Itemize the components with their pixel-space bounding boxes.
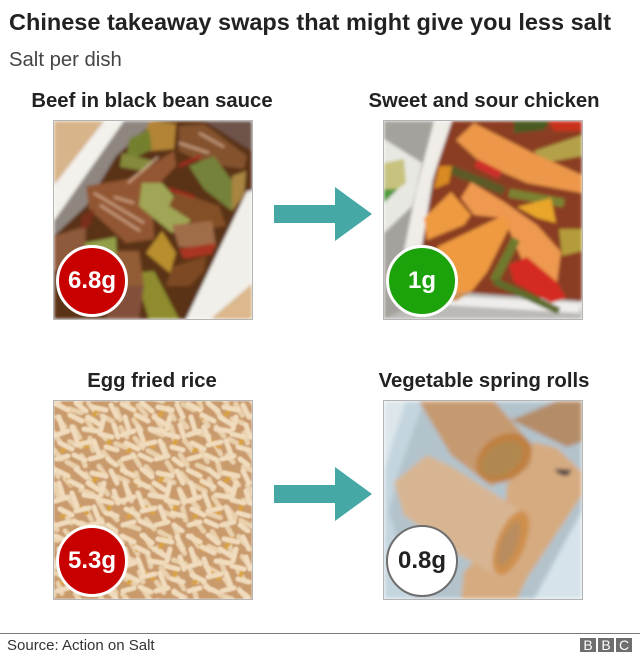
photo panel: sweet and sour chicken	[383, 120, 583, 320]
salt badge: 6.8g	[56, 245, 128, 317]
photo panel: beef in black bean sauce	[53, 120, 253, 320]
BBC logo: C	[619, 637, 629, 653]
title: Chinese takeaway swaps that might give you less salt	[9, 9, 611, 35]
source note: Source: Action on Salt	[7, 637, 155, 654]
salt badge: 6.8g: 6.8g	[68, 267, 116, 294]
heading: sweet and sour chicken: Sweet and sour chicken	[368, 90, 600, 112]
salt badge: 1g: 1g	[408, 267, 436, 294]
BBC logo: B	[583, 637, 593, 653]
salt badge: 0.8g: 0.8g	[398, 547, 446, 574]
salt badge: 5.3g: 5.3g	[68, 547, 116, 574]
footer rule	[0, 633, 640, 634]
photo panel: vegetable spring rolls	[383, 400, 583, 600]
BBC logo: B	[601, 637, 611, 653]
salt badge: 5.3g	[56, 525, 128, 597]
subtitle: Salt per dish	[9, 49, 122, 71]
heading: egg fried rice: Egg fried rice	[87, 370, 217, 392]
salt badge: 1g	[386, 245, 458, 317]
photo panel: egg fried rice	[53, 400, 253, 600]
arrow: swap rice for spring rolls	[274, 467, 372, 521]
heading: vegetable spring rolls: Vegetable spring rolls	[379, 370, 589, 392]
heading: beef in black bean sauce: Beef in black bean sauce	[31, 90, 273, 112]
arrow: swap beef for chicken	[274, 187, 372, 241]
salt badge: 0.8g	[386, 525, 458, 597]
BBC logo	[580, 637, 632, 653]
